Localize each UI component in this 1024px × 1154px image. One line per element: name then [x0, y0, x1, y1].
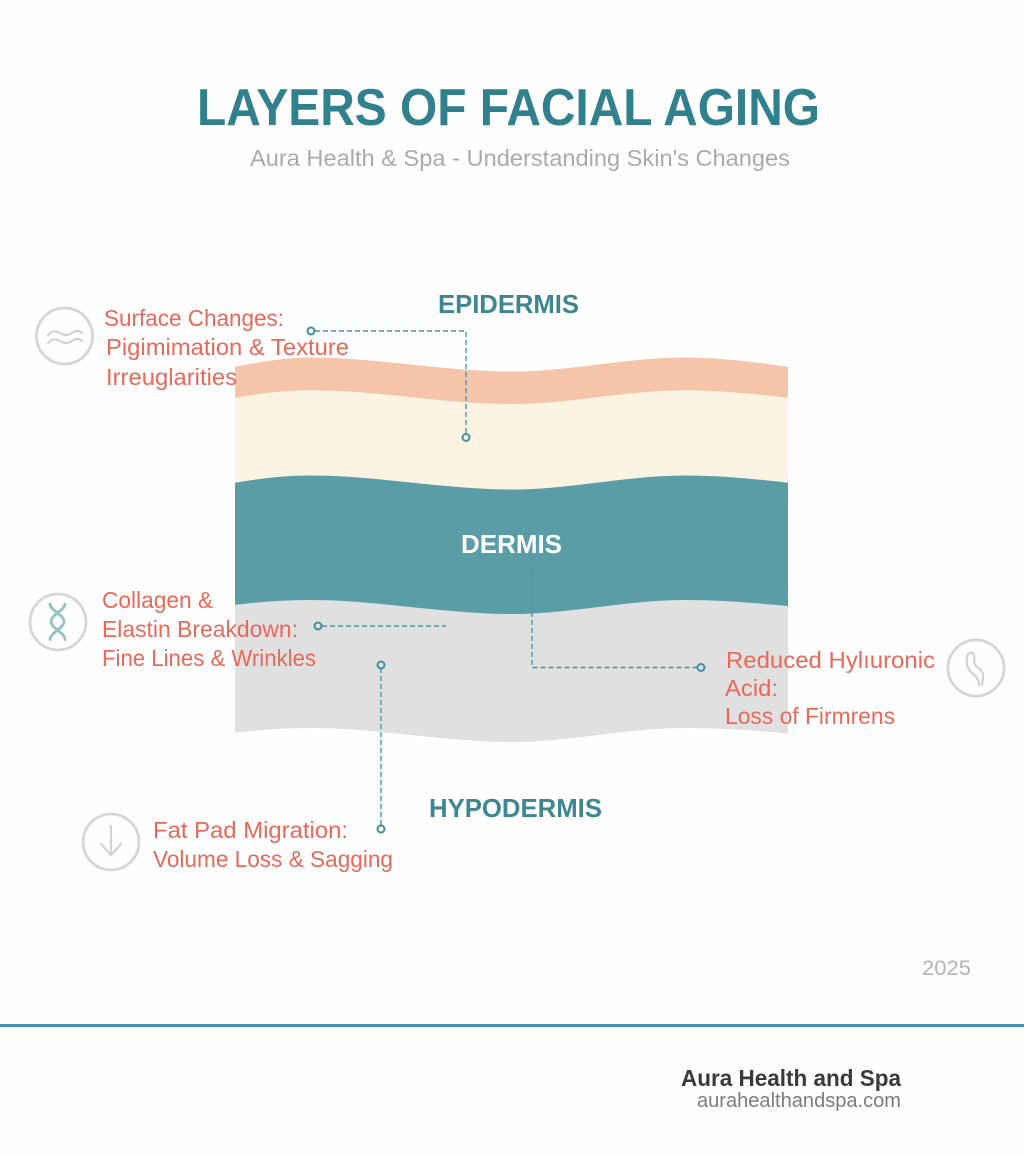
connector: hyaluronic acid	[532, 572, 704, 671]
footer brand: aurahealthandspa.com	[697, 1090, 901, 1112]
icon: down arrow	[83, 814, 139, 870]
skin layers diagram	[235, 358, 788, 742]
callout: hyaluronic acid: Reduced Hylıuronic	[726, 647, 935, 673]
callout: collagen and elastin: Elastin Breakdown:	[102, 616, 298, 642]
connector: fat pad	[378, 662, 384, 832]
callout: collagen and elastin: Fine Lines & Wrinkles	[102, 645, 316, 671]
callout: hyaluronic acid: Acid:	[725, 675, 778, 701]
callout: surface changes: Surface Changes:	[104, 305, 284, 331]
icon: dna helix	[30, 594, 86, 650]
layer: dermis band	[235, 476, 788, 620]
layer: lower epidermis band	[235, 390, 788, 500]
label: hypodermis: HYPODERMIS	[429, 793, 602, 823]
footer brand: Aura Health and Spa	[681, 1065, 901, 1091]
label: epidermis: EPIDERMIS	[438, 289, 579, 319]
subtitle: Aura Health & Spa - Understanding Skin's Changes	[250, 145, 790, 171]
callout: surface changes: Pigimimation & Texture	[106, 334, 349, 360]
footer brand	[681, 1065, 901, 1112]
icon: surface waves	[36, 308, 92, 364]
callout: fat pad migration: Fat Pad Migration:	[153, 817, 348, 843]
icon: hyaluronic drop	[948, 640, 1004, 696]
callout: surface changes	[104, 305, 349, 390]
callout: hyaluronic acid: Loss of Firmrens	[725, 703, 895, 729]
callout: surface changes: Irreuglarities	[106, 364, 237, 390]
layer: hypodermis band	[235, 600, 788, 742]
title: LAYERS OF FACIAL AGING	[197, 79, 820, 137]
callout: collagen and elastin	[102, 587, 316, 671]
callout: fat pad migration: Volume Loss & Sagging	[153, 846, 393, 872]
year: 2025	[922, 956, 971, 980]
footer rule	[0, 1024, 1024, 1027]
connector: collagen	[314, 622, 446, 630]
callout: collagen and elastin: Collagen &	[102, 587, 213, 613]
connector: surface changes	[308, 328, 470, 441]
callout: hyaluronic acid	[725, 647, 935, 729]
label: dermis: DERMIS	[461, 531, 562, 559]
layer: upper epidermis band	[235, 358, 788, 420]
callout: fat pad migration	[153, 817, 393, 872]
